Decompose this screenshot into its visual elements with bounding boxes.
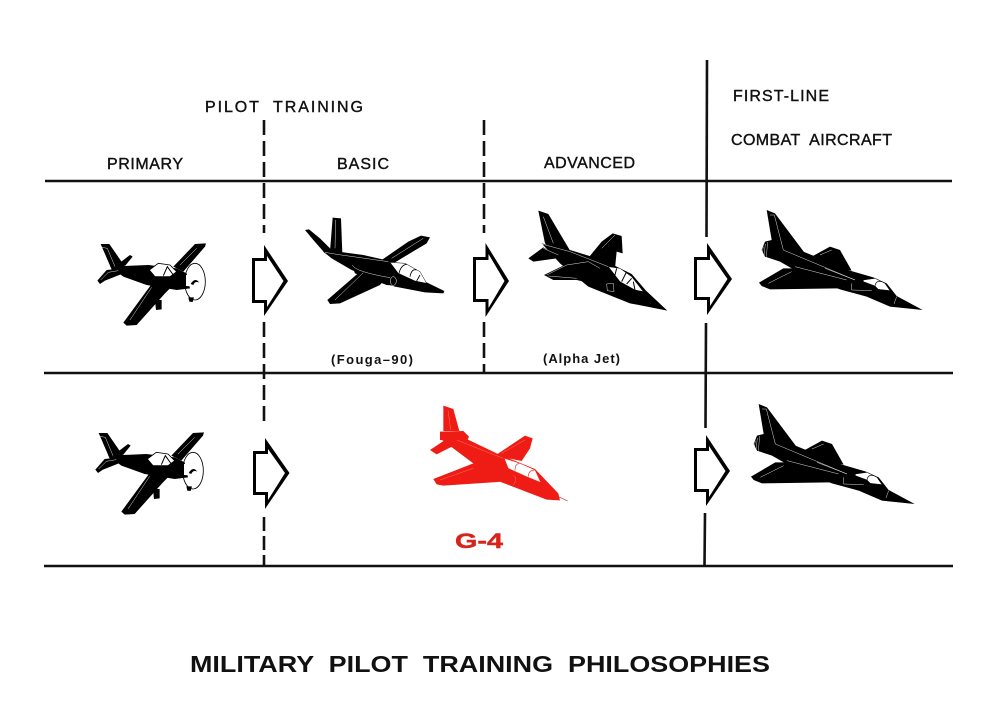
aircraft: Fouga-90 [305,218,444,304]
arrow: G-4 to combat, row two [694,435,730,506]
aircraft: Alpha Jet [528,211,667,311]
heading: basic: BASIC [337,156,389,173]
heading: pilot training: PILOT TRAINING [205,99,363,116]
aircraft: primary trainer, row one [97,243,206,326]
label: Alpha Jet: (Alpha Jet) [543,351,620,366]
heading: combat aircraft: COMBAT AIRCRAFT [731,132,892,149]
heading: advanced: ADVANCED [544,155,635,172]
heading: primary: PRIMARY [107,156,183,173]
arrow: primary to G-4, row two [253,438,290,509]
aircraft: primary trainer, row two [95,432,204,515]
divider: primary to basic dashed line [263,120,265,566]
arrow: primary to basic, row one [252,245,288,316]
rule: top horizontal line [45,180,952,182]
label: Fouga-90: (Fouga–90) [331,352,413,367]
aircraft: G-4 in red [430,406,568,501]
aircraft: combat jet, row one [759,210,923,310]
heading: first-line: FIRST-LINE [733,88,829,105]
aircraft: combat jet, row two [751,404,915,504]
label: G-4: G-4 [455,530,503,553]
rule: middle horizontal line [44,372,953,374]
arrow: basic to advanced, row one [473,243,509,317]
divider: training to combat solid line [704,60,707,566]
title: MILITARY PILOT TRAINING PHILOSOPHIES [190,651,770,677]
arrow: advanced to combat, row one [694,243,732,315]
divider: basic to advanced dashed line [483,120,485,373]
rule: bottom horizontal line [44,565,953,567]
